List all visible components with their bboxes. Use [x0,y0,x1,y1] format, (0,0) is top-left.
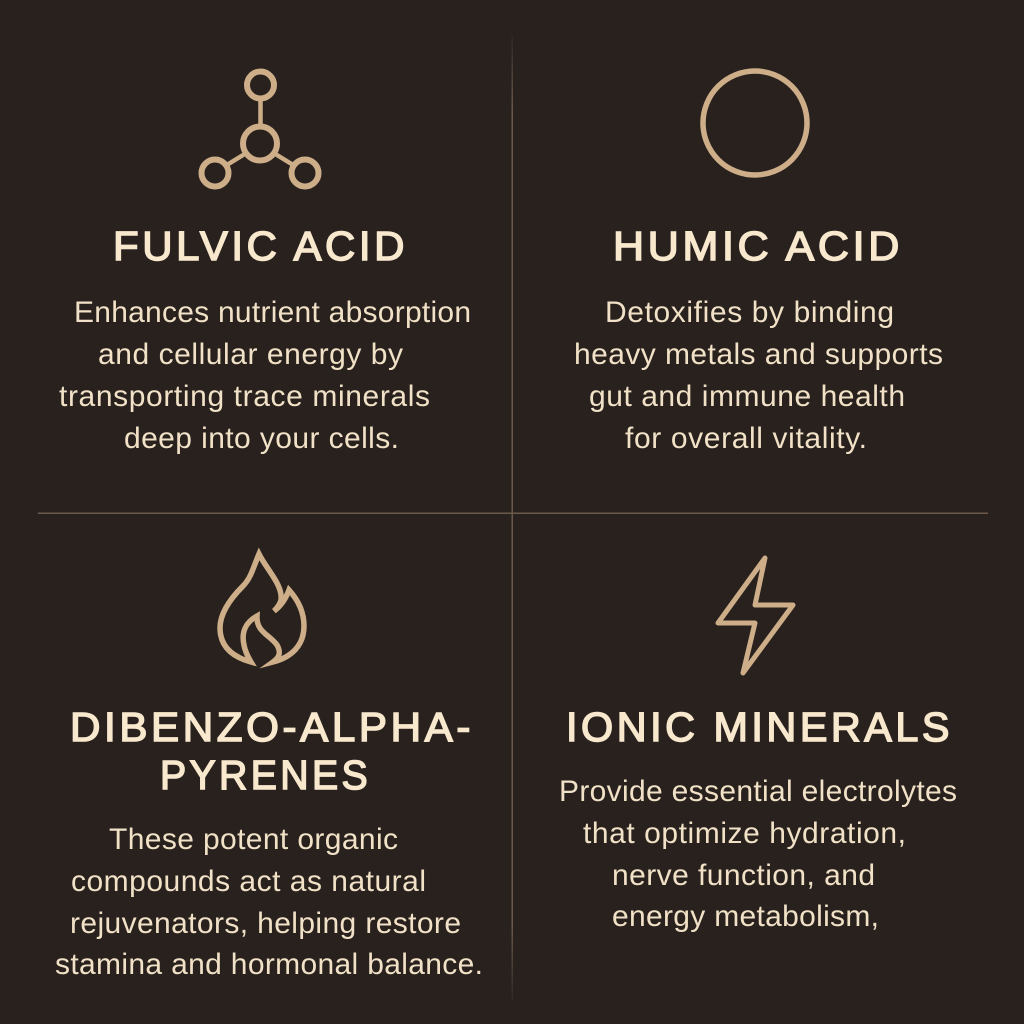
text: ionic description: that optimize hydration, [583,817,906,850]
text: humic description: gut and immune health [589,380,905,413]
icon: lightning bolt [718,558,793,673]
text: ionic description: Provide essential electrolytes [559,775,957,808]
text: fulvic description: transporting trace minerals [59,380,430,413]
text: dibenzo description: stamina and hormonal balance. [55,948,483,981]
text: humic description [574,296,943,455]
text: dibenzo description: rejuvenators, helping restore [70,907,461,940]
text: dibenzo description [55,823,483,981]
text: fulvic description [59,296,471,455]
text: fulvic description: Enhances nutrient absorption [74,296,471,329]
text: fulvic description: deep into your cells. [124,422,399,455]
text: ionic description [559,775,957,933]
icon: molecule [202,72,318,186]
heading: ionic minerals: IONIC MINERALS [566,704,953,750]
heading: fulvic acid: FULVIC ACID [113,223,408,269]
text: ionic description: nerve function, and [612,859,875,892]
heading: humic acid: HUMIC ACID [613,223,903,269]
panel: dibenzo-alpha-pyrenes [55,554,483,981]
text: ionic description: energy metabolism, [612,900,879,933]
text: fulvic description: and cellular energy by [98,338,403,371]
panel: ionic minerals [559,558,957,933]
panel: fulvic acid [59,72,471,455]
heading: pyrenes: PYRENES [160,752,371,798]
text: humic description: Detoxifies by binding [605,296,894,329]
icon: flame [220,554,304,662]
panel: humic acid [574,71,943,455]
text: humic description: for overall vitality. [625,422,867,455]
heading: dibenzo-alpha-: DIBENZO-ALPHA- [70,704,474,750]
text: humic description: heavy metals and supports [574,338,943,371]
text: dibenzo description: compounds act as natural [71,865,426,898]
icon: circle [703,71,807,175]
text: dibenzo description: These potent organic [109,823,398,856]
